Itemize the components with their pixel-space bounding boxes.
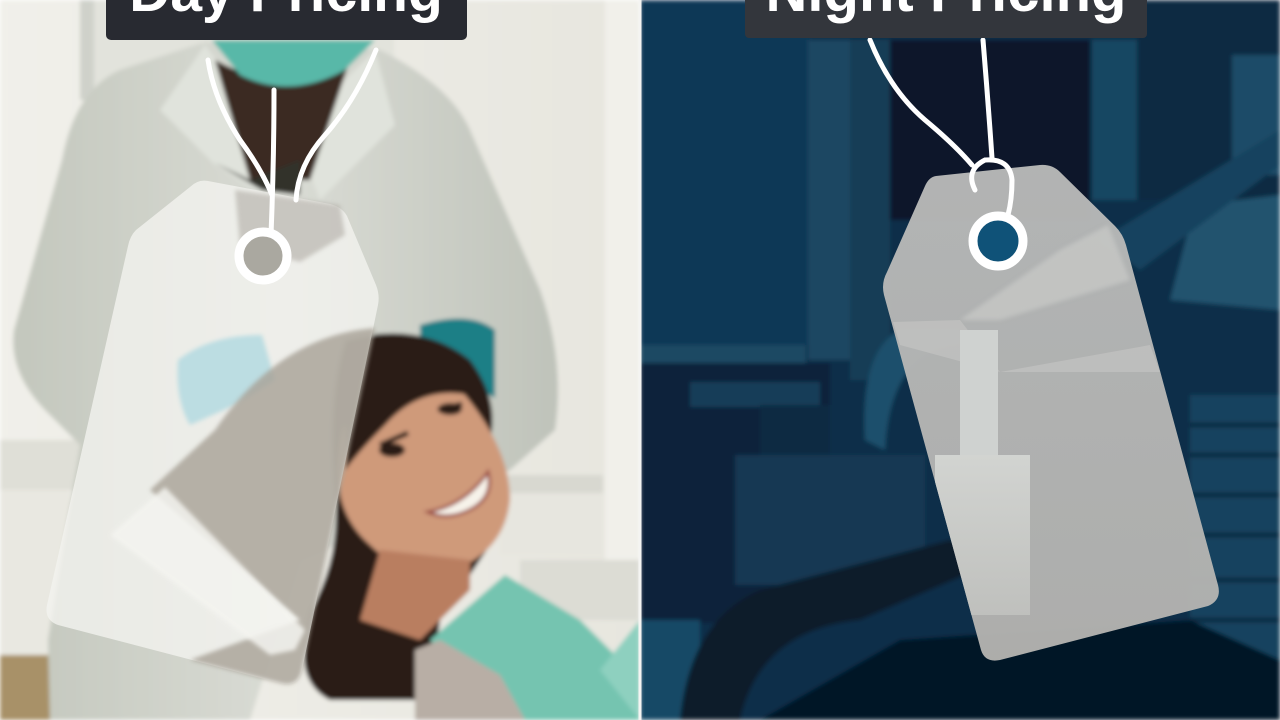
- heading: Night Pricing: [745, 0, 1147, 38]
- patient with dark hair: [303, 333, 640, 720]
- panel: day photo of dentist and smiling patient: [0, 0, 640, 720]
- price tag: day: [46, 181, 379, 684]
- panel: night photo of empty dental room: [640, 0, 1280, 720]
- heading: Day Pricing: [106, 0, 467, 40]
- price tag: night: [883, 165, 1219, 661]
- dentist in white coat: [13, 40, 558, 720]
- tag string and eyelet: night: [870, 40, 1023, 266]
- tag string and eyelet: day: [208, 50, 376, 280]
